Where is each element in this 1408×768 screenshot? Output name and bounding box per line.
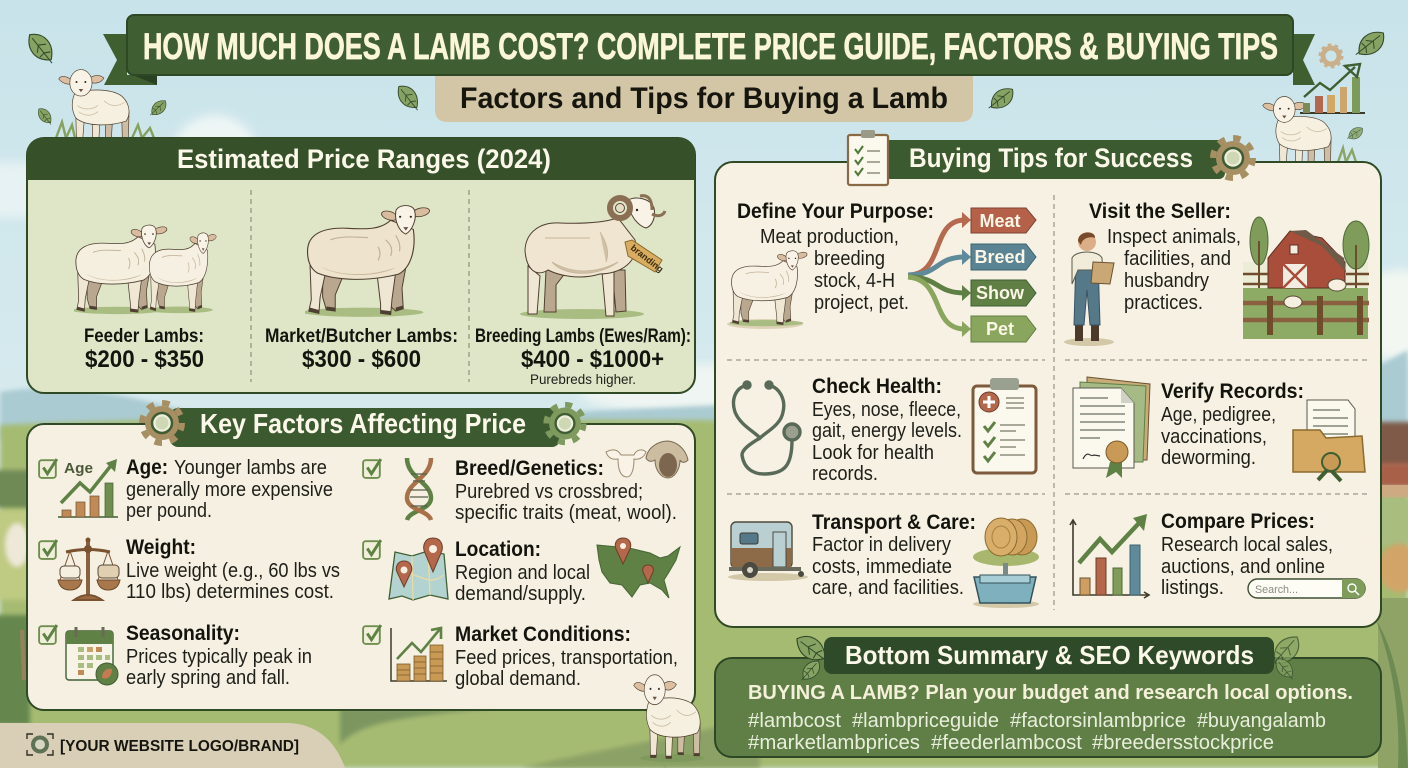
hashtags bbox=[748, 710, 1326, 754]
icon: gear right bbox=[546, 405, 584, 442]
tip: compare prices bbox=[1070, 510, 1365, 599]
icon: clipboard heading bbox=[848, 130, 888, 185]
icon: health clipboard bbox=[973, 378, 1036, 473]
panel: buying tips for success bbox=[715, 130, 1381, 627]
tip: define your purpose: Define Your Purpose: bbox=[737, 200, 934, 223]
icon: market lamb bbox=[302, 206, 431, 317]
heading: estimated price ranges: Estimated Price Ranges (2024) bbox=[177, 144, 551, 174]
tip: compare prices: Compare Prices: bbox=[1161, 510, 1315, 533]
brand text: [YOUR WEBSITE LOGO/BRAND] bbox=[60, 738, 299, 755]
icon: gear left bbox=[142, 403, 182, 443]
summary call to action: BUYING A LAMB? Plan your budget and research local options. bbox=[748, 682, 1353, 704]
brand tab bbox=[0, 723, 345, 768]
breeding lambs label: Purebreds higher. bbox=[530, 371, 636, 387]
factor: weight bbox=[39, 536, 340, 603]
tip: compare prices: auctions, and online bbox=[1161, 556, 1325, 578]
factor: market conditions: Market Conditions: bbox=[455, 623, 631, 646]
icon: documents with seal bbox=[1073, 377, 1150, 478]
feeder lambs label bbox=[84, 326, 204, 373]
market lambs label bbox=[265, 326, 458, 373]
tip: check health: Look for health bbox=[812, 442, 934, 464]
lamb bottom right of factors panel bbox=[634, 675, 704, 762]
tag: show: Show bbox=[976, 283, 1025, 303]
breeding lambs label: $400 - $1000+ bbox=[521, 346, 664, 373]
factor: age: generally more expensive bbox=[126, 479, 333, 501]
feeder lambs label: $200 - $350 bbox=[85, 346, 204, 373]
tip: define your purpose: Meat production, bbox=[760, 226, 899, 248]
lamb standing on price panel bbox=[38, 70, 167, 144]
factor: market conditions: global demand. bbox=[455, 668, 581, 690]
heading: key factors: Key Factors Affecting Price bbox=[200, 408, 526, 439]
tip: verify records: vaccinations, bbox=[1161, 426, 1267, 448]
tip: define your purpose: project, pet. bbox=[814, 292, 909, 314]
factor: weight: 110 lbs) determines cost. bbox=[126, 581, 334, 603]
tip: visit the seller: husbandry bbox=[1124, 270, 1209, 292]
tip: check health: Check Health: bbox=[812, 375, 942, 398]
factor: breed and genetics: specific traits (meat, wool). bbox=[455, 502, 677, 524]
tip: transport and care: costs, immediate bbox=[812, 556, 952, 578]
icon: logo placeholder bbox=[27, 734, 53, 755]
factor: weight: Weight: bbox=[126, 536, 196, 559]
panel: bottom summary and keywords bbox=[715, 632, 1381, 757]
tip: visit the seller: facilities, and bbox=[1124, 248, 1231, 270]
tag: meat: Meat bbox=[979, 211, 1021, 231]
factor: location: demand/supply. bbox=[455, 583, 586, 605]
title banner bbox=[103, 15, 1315, 85]
arrows to purposes bbox=[908, 212, 971, 337]
factor: seasonality bbox=[39, 622, 312, 689]
leaf top right bbox=[1356, 32, 1384, 55]
factor: breed and genetics: Breed/Genetics: bbox=[455, 457, 604, 480]
hashtags: #lambpriceguide bbox=[852, 710, 999, 732]
icon: barn and pasture bbox=[1243, 217, 1369, 339]
breeding lambs label: Breeding Lambs (Ewes/Ram): bbox=[475, 326, 691, 347]
lamb top right bbox=[1263, 97, 1363, 169]
tip: visit the seller: Visit the Seller: bbox=[1089, 200, 1231, 223]
factor: breed and genetics bbox=[363, 441, 688, 524]
hashtags: #feederlambcost bbox=[931, 732, 1082, 754]
tip: visit the seller: Inspect animals, bbox=[1107, 226, 1241, 248]
hashtags: #buyangalamb bbox=[1197, 710, 1326, 732]
icon: breeding ram with tag: branding bbox=[629, 243, 665, 274]
icon: folder with seal bbox=[1293, 400, 1365, 481]
hashtags: #lambcost bbox=[748, 710, 841, 732]
hashtags: #marketlambprices bbox=[748, 732, 920, 754]
factor: location: Region and local bbox=[455, 562, 590, 584]
search box: Search... bbox=[1255, 584, 1298, 596]
tip: transport and care: Transport & Care: bbox=[812, 511, 976, 534]
icon: livestock trailer bbox=[728, 522, 808, 581]
tag: breed bbox=[971, 244, 1036, 270]
panel: estimated price ranges bbox=[27, 138, 695, 393]
icon: comparison chart bbox=[1070, 514, 1149, 598]
factor: age: Younger lambs are bbox=[174, 457, 327, 479]
tag: meat bbox=[971, 208, 1036, 233]
tip: compare prices: Research local sales, bbox=[1161, 534, 1333, 556]
tip: check health: gait, energy levels. bbox=[812, 420, 962, 442]
icon: two feeder lambs bbox=[72, 225, 217, 314]
icon: breeding ram with tag bbox=[520, 196, 665, 319]
panel: key factors affecting price bbox=[27, 403, 695, 710]
subtitle banner bbox=[435, 76, 973, 122]
icon: water trough bbox=[973, 563, 1039, 608]
tip: define your purpose: stock, 4-H bbox=[814, 270, 895, 292]
tip: define your purpose: breeding bbox=[814, 248, 885, 270]
factor: seasonality: Seasonality: bbox=[126, 622, 240, 645]
factor: location bbox=[363, 538, 680, 605]
leaf right of subtitle bbox=[989, 89, 1013, 108]
tip: verify records: Verify Records: bbox=[1161, 380, 1304, 403]
factor: seasonality: Prices typically peak in bbox=[126, 646, 312, 668]
leaf left of subtitle bbox=[398, 86, 418, 110]
factor: location: Location: bbox=[455, 538, 541, 561]
market lambs label: Market/Butcher Lambs: bbox=[265, 326, 458, 347]
tip: define your purpose bbox=[727, 200, 1036, 342]
market lambs label: $300 - $600 bbox=[302, 346, 421, 373]
tag: breed: Breed bbox=[974, 247, 1026, 267]
icon: gear heading bbox=[1213, 138, 1253, 178]
tip: transport and care bbox=[728, 511, 1039, 608]
icon: lamb bbox=[727, 251, 808, 329]
factor: seasonality: early spring and fall. bbox=[126, 667, 290, 689]
leaves beside summary heading bbox=[796, 632, 1302, 680]
tip: transport and care: Factor in delivery bbox=[812, 534, 951, 556]
feeder lambs label: Feeder Lambs: bbox=[84, 326, 204, 347]
tip: check health: Eyes, nose, fleece, bbox=[812, 399, 961, 421]
icon: stethoscope bbox=[734, 382, 800, 474]
tip: transport and care: care, and facilities. bbox=[812, 577, 964, 599]
tip: verify records bbox=[1073, 377, 1365, 481]
tag: show bbox=[971, 280, 1036, 306]
heading: buying tips: Buying Tips for Success bbox=[909, 143, 1193, 173]
factor: market conditions bbox=[363, 623, 678, 690]
heading: bottom summary: Bottom Summary & SEO Keywords bbox=[845, 640, 1254, 670]
tag: pet bbox=[971, 316, 1036, 342]
factor: breed and genetics: Purebred vs crossbred; bbox=[455, 481, 643, 503]
search box bbox=[1248, 579, 1365, 598]
hashtags: #factorsinlambprice bbox=[1010, 710, 1186, 732]
tip: check health: records. bbox=[812, 463, 878, 485]
factor: weight: Live weight (e.g., 60 lbs vs bbox=[126, 560, 340, 582]
leaf decoration top left bbox=[29, 34, 52, 63]
icon: top right growth chart with gear bbox=[1300, 45, 1365, 113]
tip: verify records: Age, pedigree, bbox=[1161, 404, 1276, 426]
factor: age bbox=[39, 456, 333, 522]
tip: visit the seller: practices. bbox=[1124, 292, 1203, 314]
tip: verify records: deworming. bbox=[1161, 447, 1256, 469]
tip: check health bbox=[734, 375, 1036, 485]
tip: visit the seller bbox=[1064, 200, 1369, 346]
factor: age: Age bbox=[64, 460, 93, 477]
tip: compare prices: listings. bbox=[1161, 577, 1224, 599]
tag: pet: Pet bbox=[986, 319, 1014, 339]
factor: age: per pound. bbox=[126, 500, 212, 522]
factor: age: Age: bbox=[126, 456, 168, 479]
icon: hay bale bbox=[973, 518, 1039, 566]
breeding lambs label bbox=[475, 326, 691, 387]
factor: market conditions: Feed prices, transportation, bbox=[455, 647, 678, 669]
icon: farmer with clipboard bbox=[1064, 232, 1114, 346]
hashtags: #breedersstockprice bbox=[1092, 732, 1274, 754]
subtitle text: Factors and Tips for Buying a Lamb bbox=[460, 82, 948, 115]
